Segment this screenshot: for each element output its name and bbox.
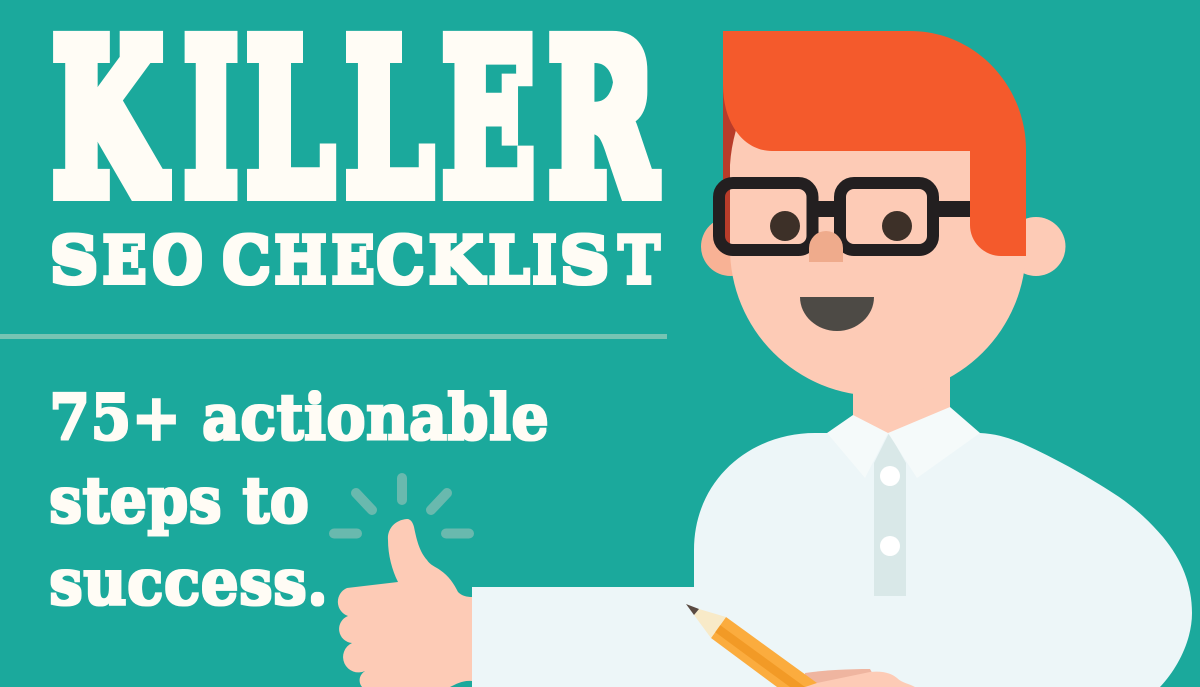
- tagline text: steps to: [49, 463, 309, 537]
- title: KILLER: I: [183, 0, 239, 240]
- left eye: [770, 211, 800, 241]
- subtitle: SEO CHECKLIST: I: [532, 223, 557, 297]
- shirt placket: [874, 433, 906, 596]
- subtitle: SEO CHECKLIST: [49, 223, 660, 297]
- dark hair behind head: [723, 80, 753, 244]
- subtitle: SEO CHECKLIST: H: [274, 223, 327, 297]
- icon: thumbs-up hand: [338, 519, 472, 687]
- subtitle: SEO CHECKLIST: C: [222, 223, 271, 297]
- shirt body: [694, 433, 1192, 687]
- subtitle: SEO CHECKLIST: C: [376, 223, 425, 297]
- title: KILLER: L: [245, 0, 335, 240]
- subtitle: SEO CHECKLIST: K: [428, 223, 486, 297]
- collar: [827, 407, 980, 478]
- paper sheet: [472, 587, 712, 687]
- subtitle: SEO CHECKLIST: O: [152, 223, 203, 297]
- subtitle: SEO CHECKLIST: E: [102, 223, 147, 297]
- hair: [723, 31, 1026, 256]
- title: KILLER: L: [344, 0, 434, 240]
- title: KILLER: R: [547, 0, 658, 240]
- subtitle: SEO CHECKLIST: S: [559, 223, 610, 297]
- neck: [853, 370, 950, 440]
- left ear: [701, 217, 760, 276]
- writing hand: [805, 672, 915, 687]
- hand shadow: [805, 669, 880, 687]
- button: [880, 466, 900, 486]
- title: KILLER: E: [441, 0, 536, 240]
- mouth: [800, 297, 874, 331]
- right eye: [882, 211, 912, 241]
- subtitle: SEO CHECKLIST: L: [488, 223, 530, 297]
- pencil: [686, 604, 822, 687]
- head: [730, 130, 1026, 396]
- tagline text: [49, 380, 549, 619]
- right ear: [1006, 217, 1066, 276]
- subtitle: SEO CHECKLIST: S: [49, 223, 99, 297]
- subtitle: SEO CHECKLIST: T: [618, 223, 660, 297]
- tagline text: 75+ actionable: [49, 380, 549, 454]
- subtitle: SEO CHECKLIST: E: [331, 223, 375, 297]
- character illustration: [472, 31, 1192, 687]
- glasses: [719, 183, 970, 250]
- tagline text: success.: [49, 545, 328, 619]
- title: KILLER: [51, 0, 658, 240]
- icon: burst lines above thumb: [334, 478, 469, 534]
- title: KILLER: K: [51, 0, 168, 240]
- button: [880, 536, 900, 556]
- nose: [809, 231, 843, 262]
